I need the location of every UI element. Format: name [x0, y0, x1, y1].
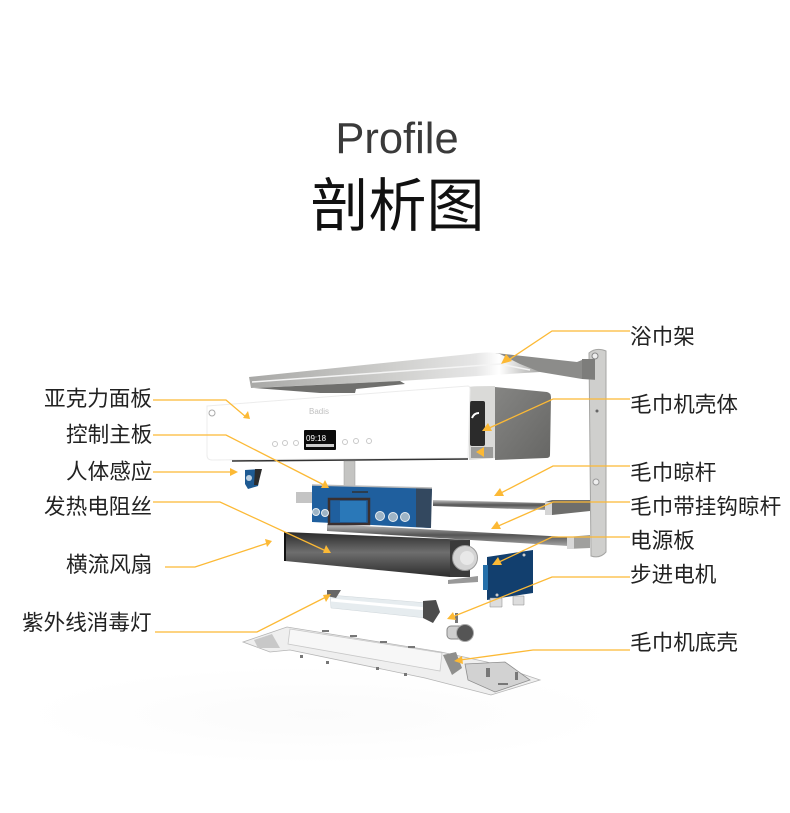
- label: 人体感应: 人体感应: [66, 459, 152, 484]
- towel rod with hooks: [327, 524, 590, 549]
- stepper motor: [447, 613, 474, 642]
- body sensor: [245, 469, 262, 489]
- support post: [344, 461, 355, 487]
- exploded product diagram: [207, 349, 606, 695]
- leader lines: [153, 331, 630, 660]
- leader arrowheads: [230, 354, 512, 664]
- cross-flow fan: [285, 532, 478, 584]
- heading: 剖析图: 剖析图: [310, 174, 485, 239]
- title: Profile: Profile: [335, 115, 459, 163]
- towel rod: [296, 492, 590, 515]
- brand: Badis: [309, 407, 329, 416]
- power board: [483, 550, 533, 607]
- touch buttons: [272, 438, 372, 446]
- UV lamp: [327, 590, 440, 623]
- wall bracket: [589, 349, 606, 557]
- display: [304, 430, 336, 450]
- acrylic panel: [207, 386, 470, 461]
- display: 09:18: [306, 434, 327, 443]
- label: 毛巾带挂钩晾杆: 毛巾带挂钩晾杆: [630, 494, 781, 519]
- label: 浴巾架: 浴巾架: [630, 324, 695, 349]
- label: 毛巾机底壳: 毛巾机底壳: [630, 630, 738, 655]
- base shell: [243, 627, 540, 695]
- label: 发热电阻丝: 发热电阻丝: [44, 494, 152, 519]
- floor shadow: [20, 665, 620, 765]
- label: 步进电机: 步进电机: [630, 562, 717, 587]
- label: 亚克力面板: 亚克力面板: [44, 386, 152, 411]
- label: 横流风扇: 横流风扇: [66, 552, 152, 577]
- control mainboard: [312, 485, 432, 528]
- label: 毛巾晾杆: 毛巾晾杆: [630, 460, 716, 485]
- towel shelf: [249, 352, 595, 393]
- label: 控制主板: 控制主板: [66, 422, 152, 447]
- label: 紫外线消毒灯: 紫外线消毒灯: [22, 610, 152, 635]
- label: 毛巾机壳体: 毛巾机壳体: [630, 392, 738, 417]
- label: 电源板: 电源板: [630, 528, 695, 553]
- machine housing: [469, 386, 551, 460]
